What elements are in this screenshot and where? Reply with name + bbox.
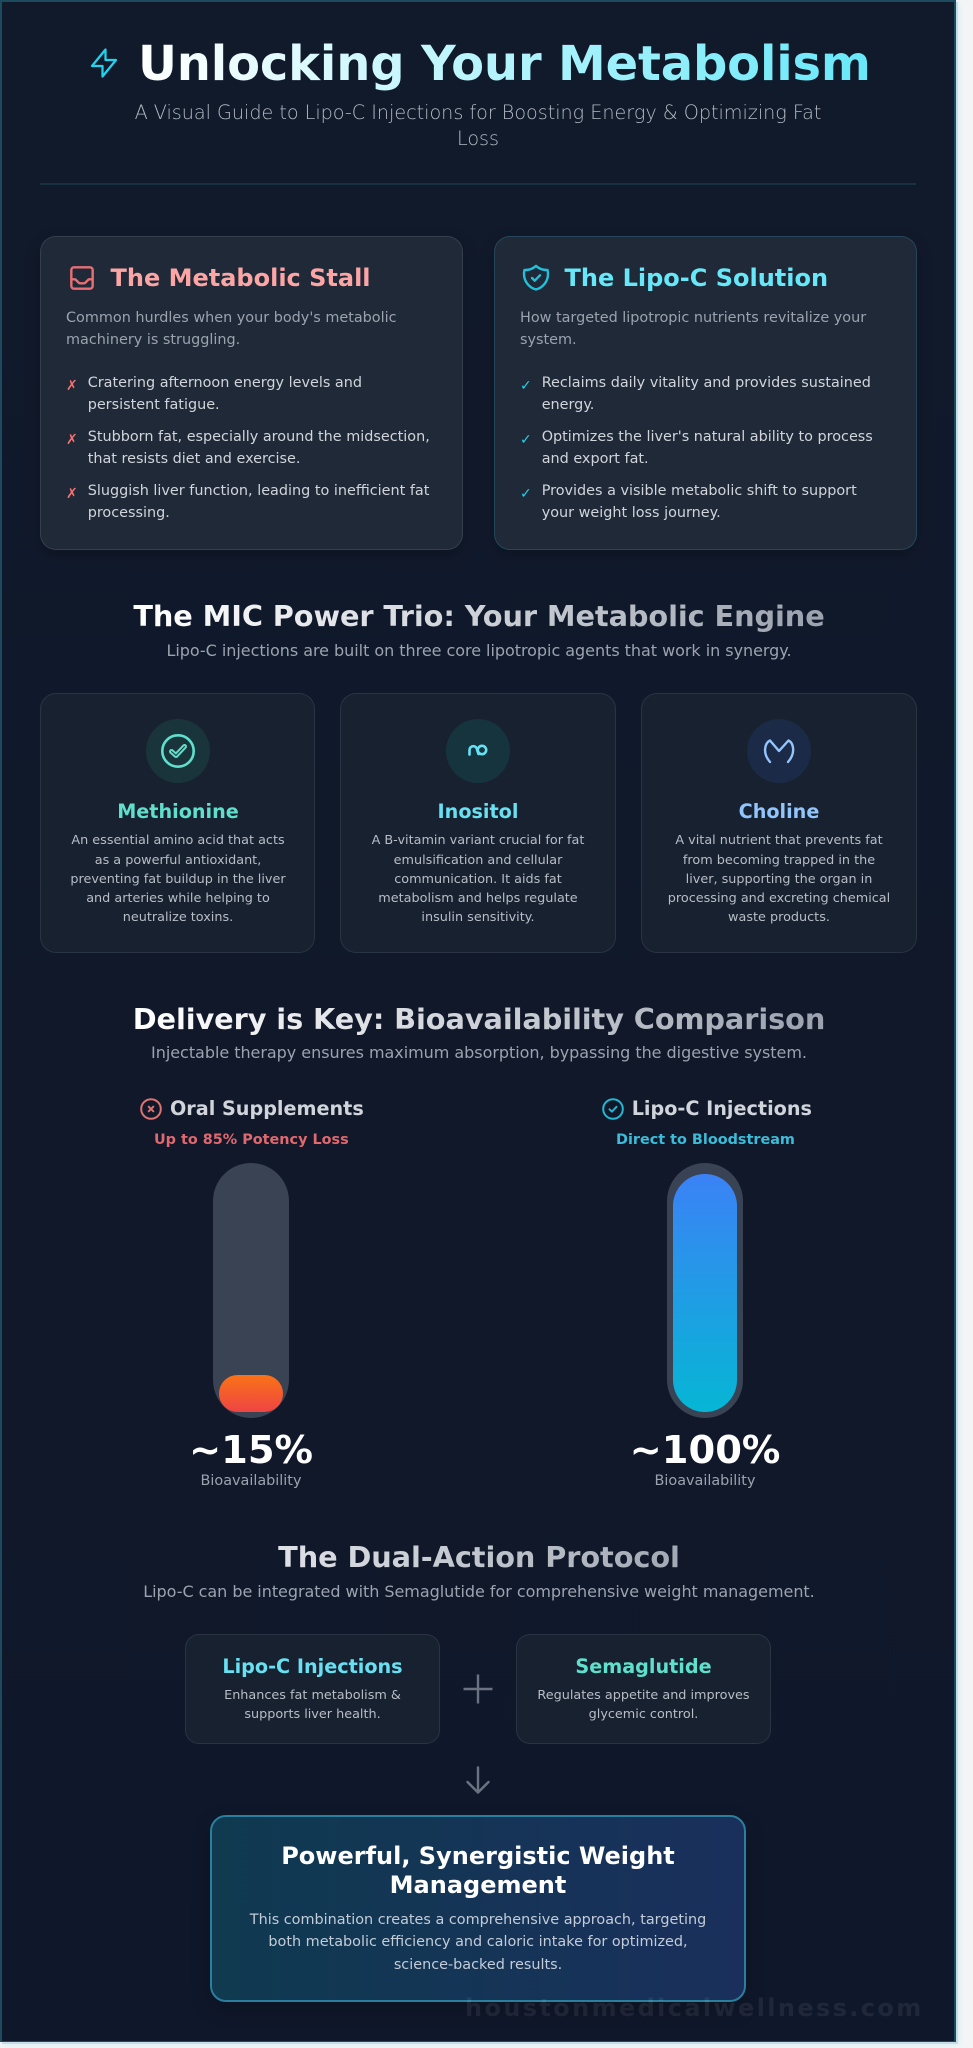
caption: Bioavailability <box>201 1473 301 1489</box>
description <box>537 1688 750 1722</box>
list item: Reclaims daily vitality and provides sustained <box>542 374 871 390</box>
callout: Up to 85% Potency Loss <box>154 1132 349 1148</box>
panel: oral supplements comparison <box>140 1097 364 1489</box>
list item: Optimizes the liver's natural ability to process <box>542 429 873 445</box>
description <box>668 833 890 925</box>
section heading: protocol <box>0 1537 958 1577</box>
bar: lipo-c 100% <box>667 1163 743 1418</box>
panel: lipo-c comparison <box>602 1097 812 1489</box>
list item: ✗ <box>66 486 78 502</box>
section heading: power trio: The MIC Power Trio: Your Metabolic Engine <box>133 599 825 633</box>
description: as a powerful antioxidant, <box>95 853 261 868</box>
icon: x circle <box>140 1098 162 1120</box>
icon: lightning bolt <box>90 48 118 78</box>
description <box>66 310 397 348</box>
description: liver, supporting the organ in <box>686 872 872 887</box>
callout: Direct to Bloodstream <box>616 1132 795 1148</box>
description: communication. It aids fat <box>394 872 562 887</box>
list item: ✓ <box>520 486 532 502</box>
icon: check circle <box>602 1098 624 1120</box>
heading: The Metabolic Stall <box>110 264 371 292</box>
icon: inbox <box>70 266 94 290</box>
name: Semaglutide <box>575 1655 712 1678</box>
description: An essential amino acid that acts <box>71 833 285 848</box>
panel: the metabolic stall <box>40 236 463 550</box>
description: processing and excreting chemical <box>668 891 890 906</box>
panel: lipo-c protocol card <box>185 1634 440 1744</box>
body text: science-backed results. <box>394 1957 562 1973</box>
label: Lipo-C Injections <box>632 1097 812 1120</box>
list item <box>520 374 871 413</box>
section subtitle: Lipo-C can be integrated with Semaglutide for comprehensive weight management. <box>143 1582 815 1601</box>
panel: semaglutide card <box>516 1634 771 1744</box>
panel: choline <box>641 693 917 953</box>
description: Regulates appetite and improves <box>537 1688 750 1703</box>
list item: energy. <box>542 397 594 413</box>
list item: Stubborn fat, especially around the midsection, <box>88 429 430 445</box>
description: A vital nutrient that prevents fat <box>675 833 883 848</box>
section heading: power trio <box>0 596 958 636</box>
description: Common hurdles when your body's metabolic <box>66 310 397 326</box>
description: glycemic control. <box>589 1707 698 1722</box>
description: system. <box>520 332 577 348</box>
icon: plus <box>464 1674 492 1704</box>
name: Inositol <box>438 800 518 823</box>
body text: both metabolic efficiency and caloric intake for optimized, <box>268 1934 688 1950</box>
section heading: delivery <box>0 999 958 1039</box>
list item: Cratering afternoon energy levels and <box>88 374 362 390</box>
description: neutralize toxins. <box>123 910 233 925</box>
list item <box>66 483 430 521</box>
description: from becoming trapped in the <box>683 853 875 868</box>
list item <box>520 429 873 467</box>
description: machinery is struggling. <box>66 332 240 348</box>
subtitle: A Visual Guide to Lipo-C Injections for Boosting Energy & Optimizing Fat <box>135 101 821 124</box>
description: waste products. <box>728 910 830 925</box>
heading: The Lipo-C Solution <box>564 264 828 292</box>
icon: shield check <box>522 264 550 291</box>
section subtitle: Injectable therapy ensures maximum absorption, bypassing the digestive system. <box>151 1043 807 1062</box>
bar: oral 15% <box>213 1163 289 1418</box>
label: Oral Supplements <box>170 1097 364 1120</box>
description: insulin sensitivity. <box>421 910 535 925</box>
heading: Powerful, Synergistic Weight <box>281 1842 675 1870</box>
heading: Management <box>390 1871 566 1899</box>
subtitle: Loss <box>457 127 499 150</box>
name: Methionine <box>117 800 239 823</box>
arrow: down <box>466 1766 490 1794</box>
readout: ~15% <box>189 1428 313 1473</box>
description <box>224 1688 401 1722</box>
list item: ✗ <box>66 378 78 394</box>
icon: molecule rings <box>446 719 510 783</box>
list item: ✓ <box>520 378 532 394</box>
description <box>70 833 286 925</box>
description: emulsification and cellular <box>394 853 562 868</box>
panel: methionine <box>40 693 315 953</box>
list item: Provides a visible metabolic shift to support <box>542 483 857 499</box>
description: A B-vitamin variant crucial for fat <box>372 833 584 848</box>
panel: the lipo-c solution <box>494 236 917 550</box>
readout: ~100% <box>630 1428 780 1473</box>
header <box>90 36 871 150</box>
list item: ✗ <box>66 432 78 448</box>
list item: and export fat. <box>542 451 649 467</box>
heading <box>281 1842 675 1899</box>
name: Choline <box>739 800 819 823</box>
list item: processing. <box>88 505 170 521</box>
description: supports liver health. <box>244 1707 381 1722</box>
panel: result <box>210 1815 746 2002</box>
list item: persistent fatigue. <box>88 397 220 413</box>
watermark: houstonmedicalwellness.com <box>465 1994 924 2022</box>
icon: check circle <box>146 719 210 783</box>
panel: inositol <box>340 693 616 953</box>
section subtitle: Lipo-C injections are built on three core lipotropic agents that work in synergy. <box>166 641 792 660</box>
description: Enhances fat metabolism & <box>224 1688 401 1703</box>
description: preventing fat buildup in the liver <box>70 872 286 887</box>
body text: This combination creates a comprehensive approach, targeting <box>250 1912 706 1928</box>
description <box>372 833 584 925</box>
section heading: protocol: The Dual-Action Protocol <box>278 1540 680 1574</box>
description: metabolism and helps regulate <box>378 891 578 906</box>
icon: choline m-shape <box>747 719 811 783</box>
caption: Bioavailability <box>655 1473 755 1489</box>
list item <box>520 483 857 521</box>
section heading: delivery: Delivery is Key: Bioavailability Comparison <box>133 1002 825 1036</box>
title: Unlocking Your Metabolism <box>138 36 871 92</box>
subtitle <box>135 101 821 150</box>
name: Lipo-C Injections <box>222 1655 403 1678</box>
description <box>520 310 866 348</box>
list item: Sluggish liver function, leading to inefficient fat <box>88 483 429 499</box>
list item <box>66 374 362 413</box>
description: and arteries while helping to <box>86 891 270 906</box>
list item: ✓ <box>520 432 532 448</box>
list item: your weight loss journey. <box>542 505 721 521</box>
body text <box>250 1912 706 1973</box>
list item: that resists diet and exercise. <box>88 451 300 467</box>
description: How targeted lipotropic nutrients revitalize your <box>520 310 866 326</box>
list item <box>66 429 430 467</box>
